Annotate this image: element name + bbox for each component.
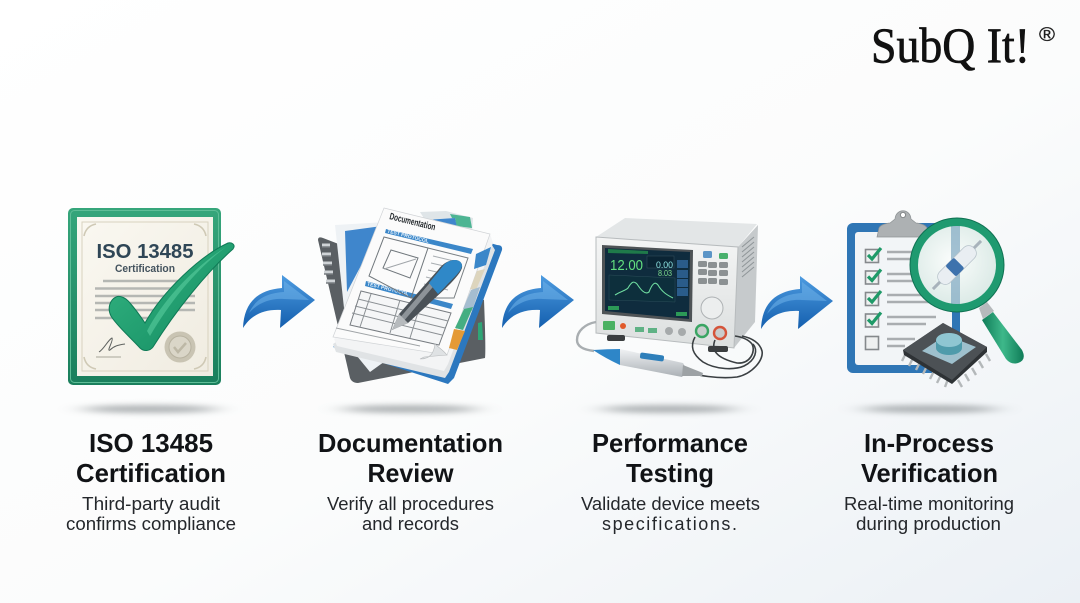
logo: SubQ It!: SubQ It! xyxy=(871,17,1030,73)
icon: test instrument with probe: 12.00 xyxy=(610,257,643,274)
icon: test instrument with probe: 0.00 xyxy=(656,260,673,270)
heading: Certification xyxy=(76,458,226,488)
heading: Verification xyxy=(861,458,998,488)
heading xyxy=(318,428,503,488)
icon: documents with pen: TEST PROTOCOL xyxy=(366,281,409,297)
icon: documents with pen: Documentation xyxy=(388,211,437,233)
description xyxy=(581,494,760,534)
icon: base shadow xyxy=(862,405,998,413)
description: confirms compliance xyxy=(66,514,236,534)
description: Third-party audit xyxy=(82,494,220,514)
description xyxy=(844,494,1014,534)
icon: checklist, magnifier and chip xyxy=(847,211,1024,387)
description xyxy=(66,494,236,534)
arrow 1 xyxy=(243,275,315,328)
icon: test instrument with probe xyxy=(577,218,762,378)
heading xyxy=(592,428,748,488)
icon: base shadow xyxy=(342,405,478,413)
heading: Testing xyxy=(626,458,714,488)
icon: documents with pen xyxy=(318,208,502,384)
icon: test instrument with probe: 8.03 xyxy=(658,269,672,278)
description: Validate device meets xyxy=(581,494,760,514)
icon: certificate with check mark: Certification xyxy=(115,263,175,275)
step 4: In-Process Verification xyxy=(844,211,1024,534)
description xyxy=(327,494,494,534)
step 2: Documentation Review xyxy=(318,208,503,534)
heading: In-Process xyxy=(864,428,994,458)
icon: base shadow xyxy=(82,405,218,413)
description: Verify all procedures xyxy=(327,494,494,514)
icon: certificate with check mark xyxy=(68,208,234,385)
heading xyxy=(76,428,226,488)
heading: Review xyxy=(368,458,454,488)
heading: ISO 13485 xyxy=(89,428,213,458)
description: Real-time monitoring xyxy=(844,494,1014,514)
step 1: ISO 13485 Certification xyxy=(66,208,236,534)
icon: base shadow xyxy=(601,405,737,413)
heading: Documentation xyxy=(318,428,503,458)
description: during production xyxy=(856,514,1001,534)
heading xyxy=(861,428,998,488)
arrow 2 xyxy=(502,275,574,328)
icon: certificate with check mark: ISO 13485 xyxy=(96,241,194,263)
heading: Performance xyxy=(592,428,748,458)
logo: SubQ It!: ® xyxy=(1039,25,1055,46)
icon: documents with pen: TEST PROTOCOL xyxy=(387,229,429,245)
description: and records xyxy=(362,514,459,534)
step 3: Performance Testing xyxy=(577,218,762,534)
description: specifications. xyxy=(602,514,737,534)
arrow 3 xyxy=(761,276,833,329)
